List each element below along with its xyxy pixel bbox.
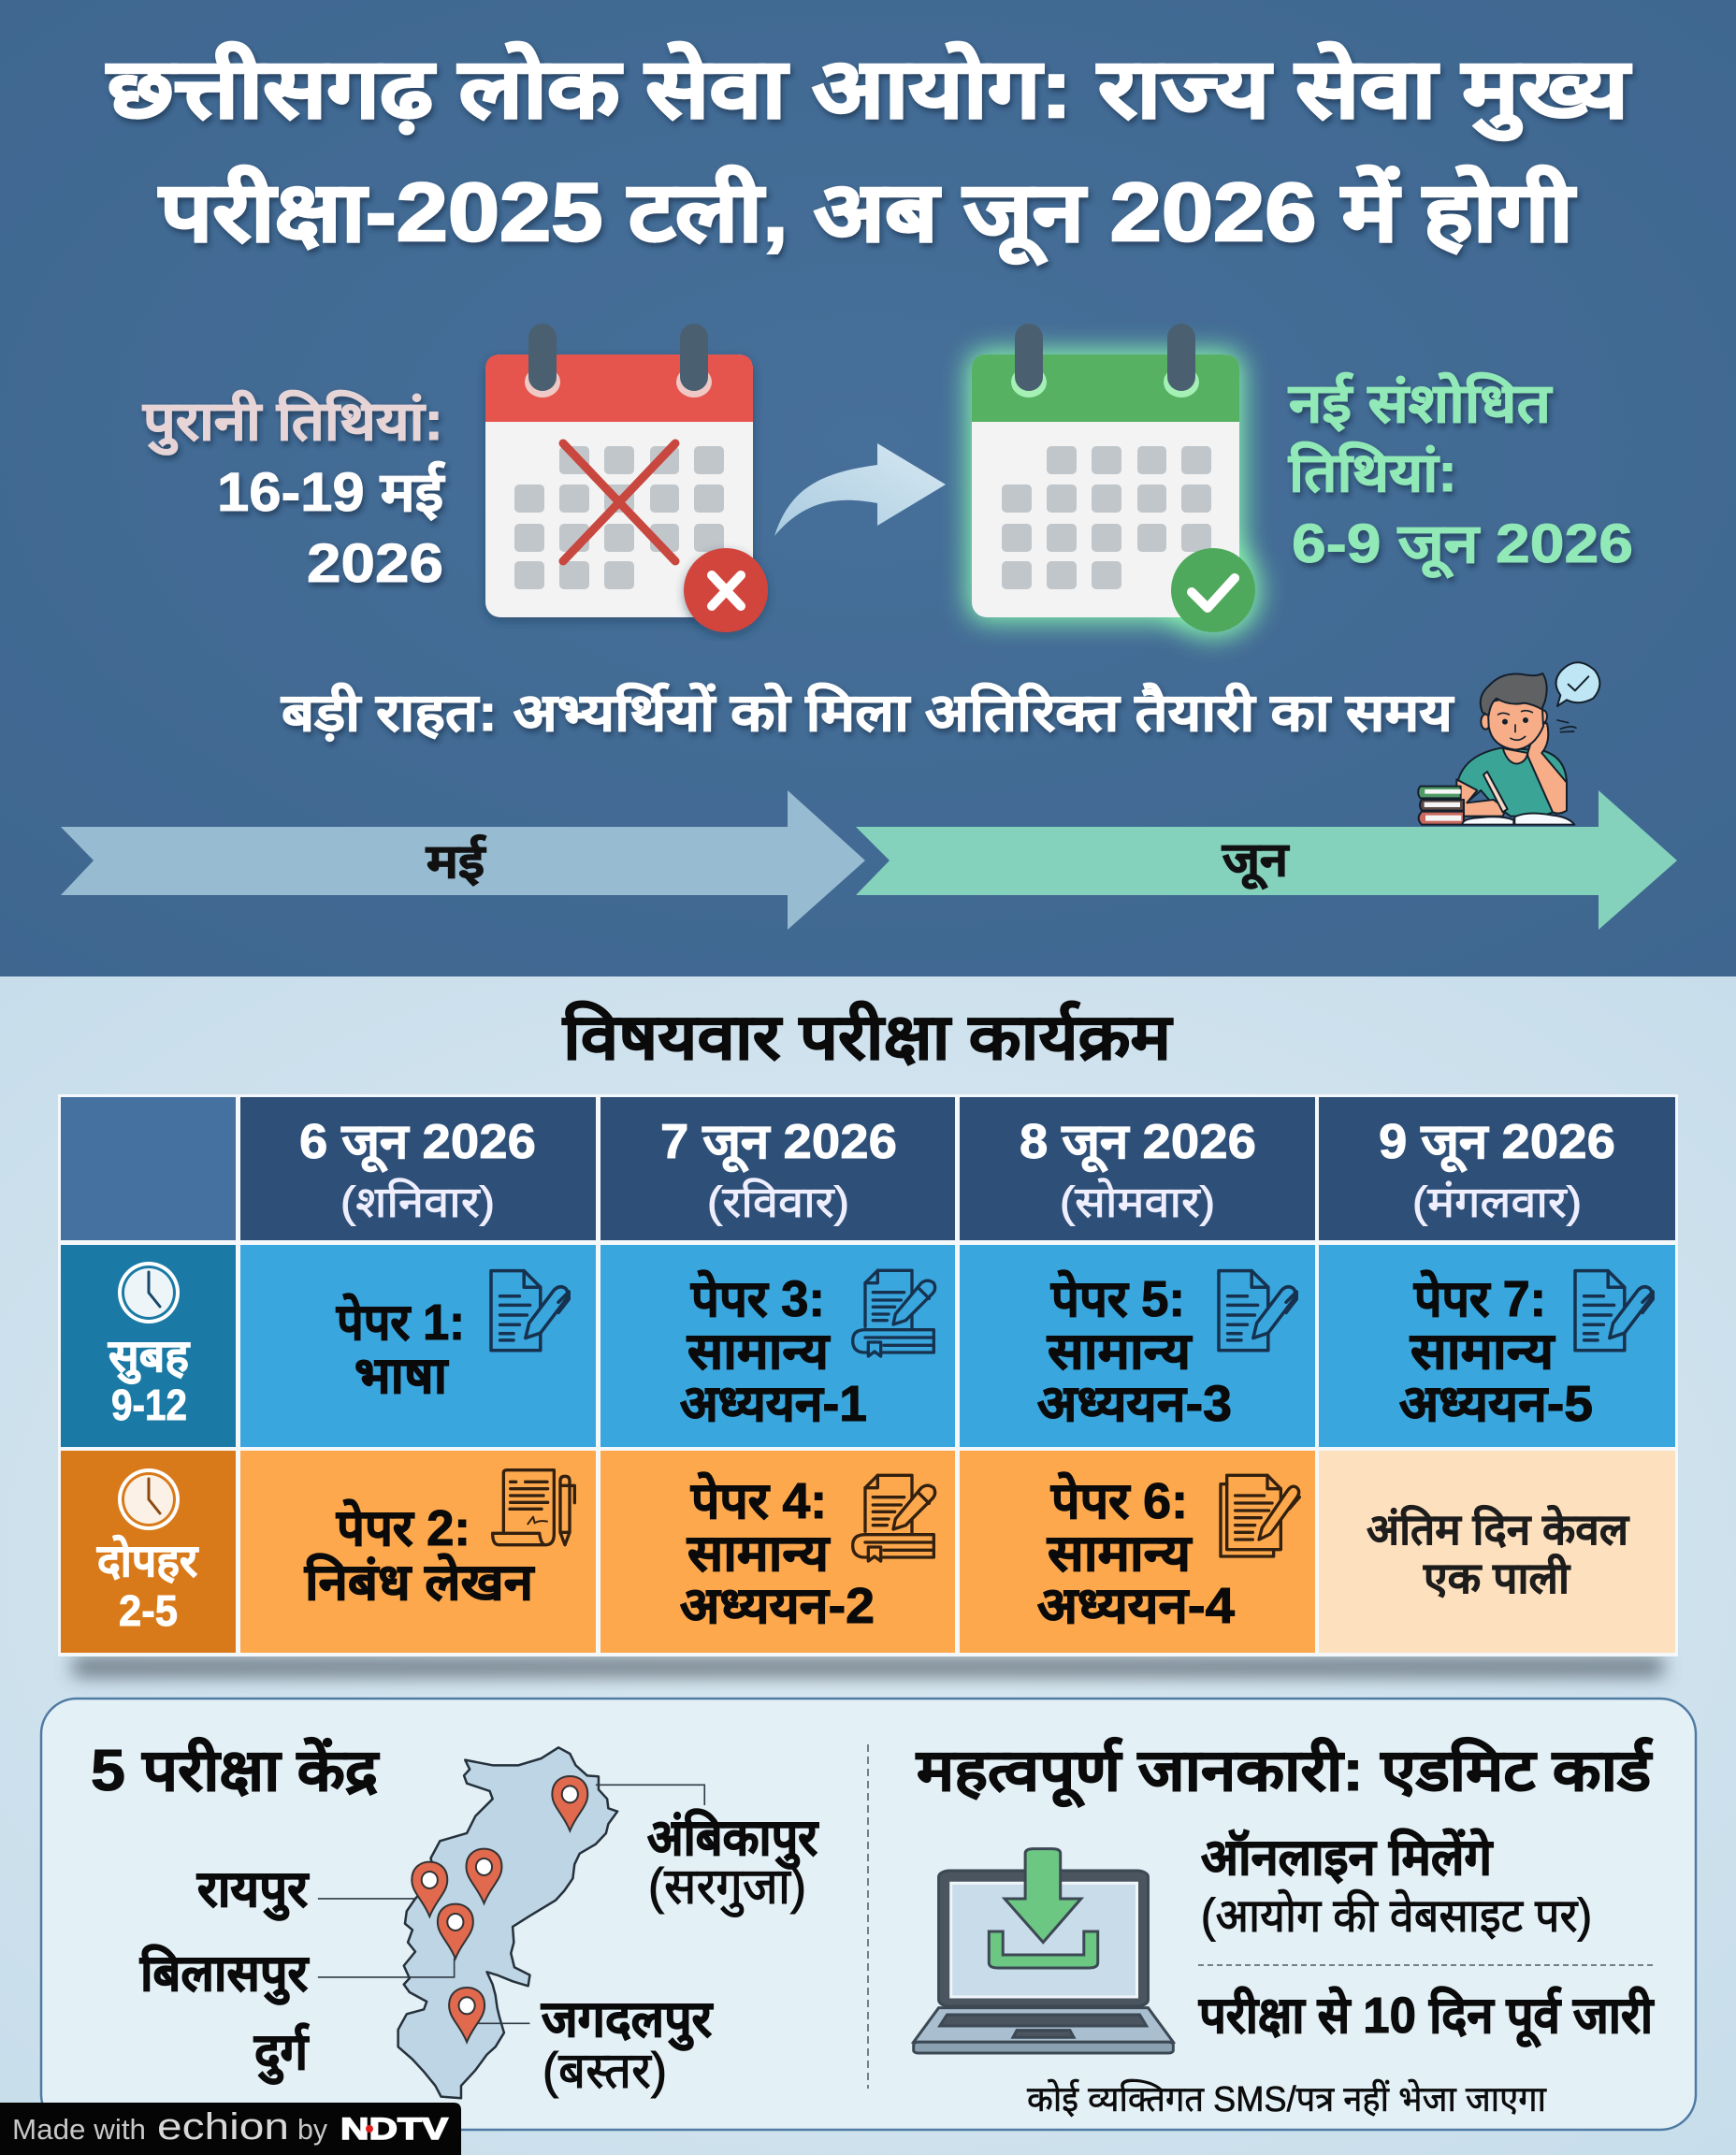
- header: 9 June: (मंगलवार): [1412, 1178, 1582, 1226]
- admit card details: (आयोग की वेबसाइट पर): [1201, 1889, 1592, 1942]
- paper 4 cell: पेपर 4:: [690, 1471, 827, 1529]
- icon: document on book: [853, 1475, 935, 1561]
- icon: document and pen: [1575, 1271, 1653, 1351]
- paper 6 cell: [960, 1451, 1315, 1653]
- map labels: रायपुर: [196, 1861, 310, 1921]
- last day note cell: एक पाली: [1423, 1554, 1571, 1602]
- paper 7 cell: पेपर 7:: [1413, 1269, 1546, 1327]
- panel: centres and admit card: [41, 1699, 1696, 2130]
- paper 3 cell: पेपर 3:: [690, 1269, 825, 1327]
- header: 9 June: [1319, 1097, 1675, 1240]
- watermark: Made with: [12, 2113, 146, 2146]
- title: [106, 41, 1631, 266]
- admit card details: कोई व्यक्तिगत SMS/पत्र नहीं भेजा जाएगा: [1027, 2078, 1547, 2119]
- pin: Ambikapur: [552, 1776, 587, 1830]
- map labels: (बस्तर): [542, 2043, 667, 2099]
- last day note cell: अंतिम दिन केवल: [1367, 1505, 1630, 1554]
- paper 4 cell: [600, 1451, 955, 1653]
- watermark: NDTV: [340, 2112, 449, 2146]
- pin: Durg: [466, 1849, 501, 1903]
- row label: morning: [61, 1245, 236, 1447]
- heading: 5 exam centres: 5 परीक्षा केंद्र: [91, 1737, 380, 1803]
- paper 3 cell: [600, 1245, 955, 1447]
- admit card details: [1027, 1828, 1655, 2119]
- icon: old calendar crossed out: [485, 324, 768, 632]
- row label: afternoon: दोपहर: [96, 1535, 199, 1586]
- icon: document and pen: [1219, 1271, 1296, 1351]
- header: 8 June: (सोमवार): [1060, 1178, 1215, 1226]
- old dates text: 2026: [307, 533, 443, 594]
- header: 7 June: 7 जून 2026: [660, 1115, 897, 1173]
- timeline arrow: June: जून: [1222, 833, 1290, 889]
- icon: student studying: [1418, 662, 1599, 825]
- timeline arrow: May: मई: [426, 834, 487, 888]
- row label: morning: 9-12: [111, 1381, 187, 1429]
- paper 3 cell: अध्ययन-1: [680, 1376, 867, 1432]
- map labels: जगदलपुर: [541, 1991, 714, 2051]
- timeline arrow: June: [856, 790, 1677, 930]
- map labels: [139, 1808, 819, 2099]
- pin: Raipur: [412, 1862, 447, 1916]
- map of Chhattisgarh with pins: [318, 1747, 704, 2098]
- timeline arrow: May: [61, 790, 865, 930]
- timetable: [58, 1094, 1678, 1676]
- header: 6 June: 6 जून 2026: [299, 1115, 536, 1173]
- top section background: [0, 0, 1736, 976]
- new dates text: 6-9 जून 2026: [1292, 513, 1633, 579]
- map labels: बिलासपुर: [139, 1944, 310, 2005]
- paper 2 cell: निबंध लेखन: [304, 1553, 535, 1611]
- header: 6 June: [240, 1097, 596, 1240]
- paper 2 cell: [240, 1451, 596, 1653]
- paper 5 cell: सामान्य: [1047, 1323, 1193, 1380]
- heading: admit card info: महत्वपूर्ण जानकारी: एडमिट कार्ड: [916, 1737, 1653, 1808]
- paper 6 cell: अध्ययन-4: [1037, 1578, 1235, 1634]
- row label: afternoon: [61, 1451, 236, 1653]
- watermark: by: [297, 2113, 327, 2146]
- title: छत्तीसगढ़ लोक सेवा आयोग: राज्य सेवा मुख्य: [106, 41, 1631, 140]
- pin: Bilaspur: [438, 1904, 473, 1959]
- lower section background: [0, 976, 1736, 2155]
- pin: Jagdalpur: [449, 1988, 485, 2042]
- icon: document on book: [853, 1270, 935, 1356]
- paper 6 cell: पेपर 6:: [1050, 1471, 1188, 1529]
- row label: afternoon: 2-5: [119, 1586, 178, 1635]
- header: 8 June: 8 जून 2026: [1020, 1115, 1256, 1173]
- old dates text: 16-19 मई: [217, 461, 446, 523]
- header: 7 June: [600, 1097, 955, 1240]
- title: परीक्षा-2025 टली, अब जून 2026 में होगी: [158, 165, 1577, 266]
- watermark: echion: [157, 2106, 289, 2148]
- paper 1 cell: पेपर 1:: [336, 1293, 465, 1351]
- old dates text: [142, 390, 446, 594]
- icon: new calendar confirmed: [968, 324, 1262, 639]
- row label: morning: सुबह: [108, 1332, 191, 1384]
- paper 3 cell: सामान्य: [687, 1323, 831, 1380]
- header: 7 June: (रविवार): [707, 1178, 849, 1226]
- paper 5 cell: अध्ययन-3: [1037, 1376, 1232, 1432]
- paper 5 cell: [960, 1245, 1315, 1447]
- watermark: [0, 2103, 461, 2155]
- paper 1 cell: भाषा: [354, 1348, 449, 1404]
- paper 6 cell: सामान्य: [1047, 1526, 1193, 1582]
- paper 5 cell: पेपर 5:: [1050, 1269, 1185, 1327]
- new dates text: [1288, 372, 1633, 579]
- admit card details: ऑनलाइन मिलेंगे: [1201, 1828, 1494, 1886]
- last day note cell: [1319, 1451, 1675, 1653]
- icon: document and pen: [491, 1271, 569, 1351]
- arrow: old to new: [774, 443, 946, 536]
- table corner cell: [61, 1097, 236, 1240]
- new dates text: तिथियां:: [1288, 441, 1457, 503]
- paper 7 cell: अध्ययन-5: [1399, 1376, 1593, 1432]
- map labels: (सरगुजा): [648, 1859, 806, 1917]
- paper 1 cell: [240, 1245, 596, 1447]
- header: 8 June: [960, 1097, 1315, 1240]
- admit card details: परीक्षा से 10 दिन पूर्व जारी: [1198, 1986, 1655, 2047]
- header: 9 June: 9 जून 2026: [1379, 1115, 1615, 1173]
- new dates text: नई संशोधित: [1288, 372, 1553, 434]
- paper 4 cell: अध्ययन-2: [680, 1578, 875, 1634]
- icon: documents and pen: [1221, 1475, 1299, 1556]
- paper 7 cell: [1319, 1245, 1675, 1447]
- paper 4 cell: सामान्य: [687, 1526, 831, 1582]
- paper 7 cell: सामान्य: [1410, 1323, 1555, 1380]
- icon: scroll and pen: [493, 1470, 574, 1545]
- map labels: अंबिकापुर: [647, 1808, 819, 1870]
- paper 2 cell: पेपर 2:: [336, 1498, 470, 1556]
- relief message: बड़ी राहत: अभ्यर्थियों को मिला अतिरिक्त तैयारी का समय: [281, 682, 1455, 742]
- header: 6 June: (शनिवार): [340, 1178, 495, 1226]
- old dates text: पुरानी तिथियां:: [142, 390, 443, 456]
- heading: subject wise exam schedule: विषयवार परीक्षा कार्यक्रम: [561, 1001, 1173, 1073]
- icon: laptop with download arrow: [914, 1849, 1173, 2053]
- map labels: दुर्ग: [253, 2022, 310, 2085]
